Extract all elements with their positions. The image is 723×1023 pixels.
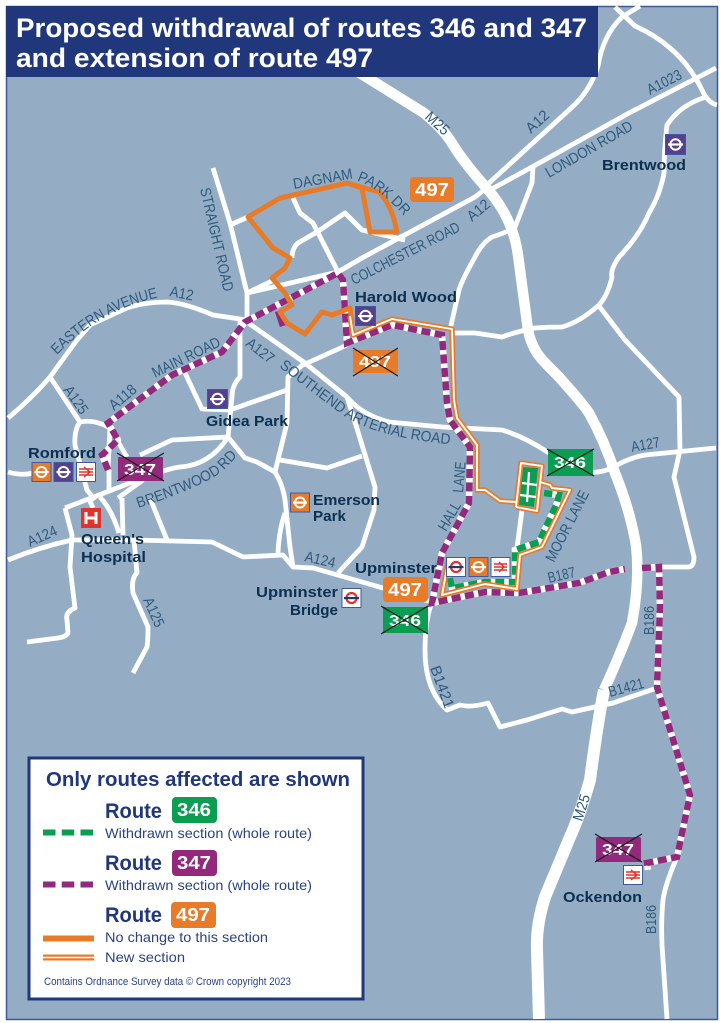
crossed badge: 346 east: 346 <box>554 455 586 472</box>
station: Upminster Bridge <box>256 584 361 619</box>
route 347 dashed line <box>102 273 690 870</box>
crossed badge: 346 Upminster: 346 <box>389 613 421 630</box>
road labels: A12 <box>464 196 494 225</box>
road labels: A127 <box>243 335 277 367</box>
legend: route 497: New section <box>105 949 185 965</box>
road labels: B1421 <box>426 664 457 711</box>
station: Gidea Park: Gidea Park <box>206 413 289 430</box>
route 346 dashed line <box>450 467 559 588</box>
road labels: A118 <box>106 381 140 414</box>
legend: route 346: Route <box>105 800 162 823</box>
crossed badge: 346 east <box>547 449 594 476</box>
station: Brentwood: Brentwood <box>602 157 686 174</box>
crossed badge: 347 Romford <box>117 453 164 481</box>
road labels: M25 <box>421 108 453 139</box>
crossed badge: 347 Ockendon: 347 <box>602 842 634 859</box>
road labels: B186 <box>641 606 658 635</box>
station: Upminster Bridge: Upminster <box>256 584 338 601</box>
road labels: MOOR LANE <box>542 488 593 565</box>
route badge: 497 Upminster: 497 <box>388 580 422 600</box>
road labels: A125 <box>60 383 91 418</box>
road labels: MAIN ROAD <box>149 334 223 382</box>
station: Upminster Bridge: Bridge <box>290 602 338 619</box>
station: Harold Wood: Harold Wood <box>355 289 457 306</box>
legend: route 497: No change to this section <box>105 929 268 945</box>
route 497 new section <box>350 316 570 595</box>
legend: route 347: Withdrawn section (whole route) <box>105 877 312 893</box>
legend: route 346: 346 <box>177 800 211 820</box>
station: Emerson Park: Park <box>313 508 347 525</box>
legend: route 497: Route <box>105 904 162 927</box>
crossed badge: 347 Romford: 347 <box>124 462 156 479</box>
legend: route 347 <box>43 850 312 893</box>
legend: route 497 <box>43 902 268 965</box>
legend: route 346: Withdrawn section (whole route) <box>105 825 312 841</box>
hospital: Queen's Hospital: Queen's <box>81 531 144 548</box>
title banner <box>6 6 598 77</box>
road labels: HALL <box>435 499 465 534</box>
crossed badge: 497 <box>353 348 398 376</box>
road labels: EASTERN AVENUE <box>50 288 158 354</box>
road labels: A12 <box>522 107 553 137</box>
station: Harold Wood <box>355 289 457 326</box>
route 497 unchanged section <box>248 183 397 334</box>
hospital: Queen's Hospital: Hospital <box>81 549 146 566</box>
copyright note: Contains Ordnance Survey data © Crown copyright 2023 <box>44 976 291 988</box>
title banner: Proposed withdrawal of routes 346 and 347 <box>16 13 587 43</box>
road labels: A124 <box>25 523 60 551</box>
road labels: A127 <box>630 434 661 456</box>
crossed badge: 347 Ockendon <box>595 834 642 862</box>
station: Brentwood <box>602 134 686 174</box>
road labels <box>25 67 685 934</box>
legend heading: Only routes affected are shown <box>46 769 350 791</box>
route badge: 497 Upminster <box>383 577 428 602</box>
road labels: SOUTHEND ARTERIAL ROAD <box>280 360 450 444</box>
route badge: 497: 497 <box>415 180 449 200</box>
road labels: STRAIGHT ROAD <box>196 186 237 293</box>
road labels: COLCHESTER ROAD <box>348 219 463 289</box>
route badge: 497 <box>410 177 454 202</box>
station: Upminster <box>355 558 510 577</box>
road labels: B1421 <box>607 675 646 701</box>
road labels: LANE <box>450 461 470 493</box>
crossed badge: 497: 497 <box>359 354 391 371</box>
road labels: A1023 <box>644 67 685 99</box>
road labels: BRENTWOOD RD <box>136 451 235 508</box>
station: Romford: Romford <box>28 445 96 462</box>
title banner: and extension of route 497 <box>16 43 373 73</box>
legend panel <box>29 758 363 999</box>
road labels: B186 <box>643 905 660 934</box>
legend: route 347: 347 <box>177 853 211 873</box>
road labels: A124 <box>303 548 337 572</box>
road labels: B187 <box>546 564 577 587</box>
road labels: M25 <box>570 792 594 823</box>
station: Ockendon <box>563 866 642 906</box>
legend: route 347: Route <box>105 852 162 875</box>
crossed badge: 346 Upminster <box>381 606 428 634</box>
station: Romford <box>28 445 96 482</box>
road labels: A12 <box>168 283 195 305</box>
road labels: LONDON ROAD <box>542 118 636 181</box>
road labels: A125 <box>139 595 167 630</box>
station: Upminster: Upminster <box>355 560 437 577</box>
station: Ockendon: Ockendon <box>563 889 642 906</box>
hospital: Queen's Hospital <box>81 508 146 566</box>
legend: route 346 <box>43 797 312 841</box>
road labels: DAGNAM PARK DR <box>293 168 410 216</box>
station: Emerson Park: Emerson <box>313 492 380 509</box>
legend: route 497: 497 <box>176 905 210 925</box>
station: Emerson Park <box>290 492 380 525</box>
station: Gidea Park <box>206 390 289 430</box>
